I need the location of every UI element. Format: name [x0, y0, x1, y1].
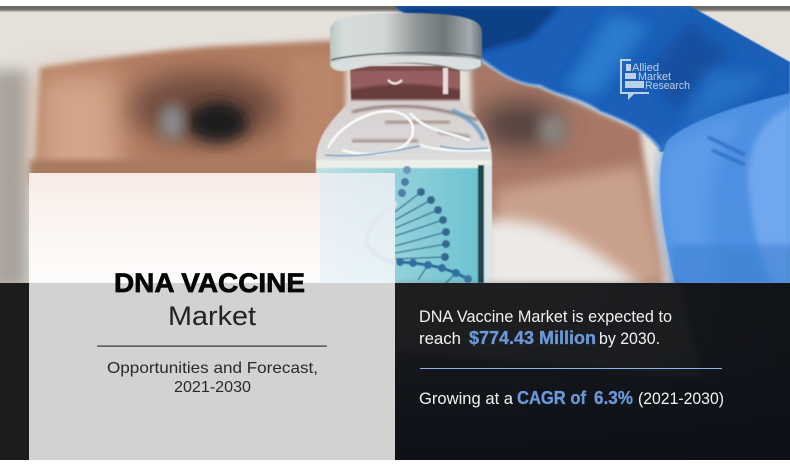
text block: forecast period: Opportunities and Forecast, — [107, 360, 318, 377]
dark bottom band — [0, 283, 790, 460]
text block: market value: reach — [419, 330, 461, 348]
logo: Allied Market Research: Research — [645, 80, 690, 92]
text block: forecast period — [107, 360, 318, 396]
icon: dark blue sleeve — [395, 6, 790, 152]
heading: DNA VACCINE: DNA VACCINE — [114, 268, 305, 298]
icon: DNA helix inside vial — [395, 166, 472, 283]
logo: Allied Market Research: Market — [638, 71, 671, 83]
text block: CAGR: 6.3% — [594, 388, 633, 408]
logo: Allied Market Research — [620, 59, 690, 100]
text block: forecast period: 2021-2030 — [174, 379, 251, 396]
right blurred skin and second eye — [470, 55, 668, 290]
icon: vaccine vial — [316, 13, 492, 285]
text block: CAGR: (2021-2030) — [638, 390, 724, 408]
text block: CAGR: Growing at a — [419, 390, 514, 408]
icon: vial cap — [330, 13, 482, 71]
text block: CAGR: CAGR of — [517, 388, 587, 408]
logo: Allied Market Research: Allied — [632, 62, 659, 74]
text block: market value: $774.43 Million — [469, 328, 596, 348]
text block: market value: by 2030. — [599, 330, 660, 348]
text block: market value — [419, 308, 672, 348]
divider between statistics — [420, 368, 722, 369]
divider under heading — [97, 346, 327, 347]
icon: light blue glove fingers — [660, 93, 790, 287]
heading: Market: Market — [168, 301, 257, 331]
text block: CAGR — [419, 388, 724, 408]
panel: title card — [29, 173, 395, 460]
text block: market value: DNA Vaccine Market is expected to — [419, 308, 672, 326]
face blurred skin — [30, 40, 360, 190]
